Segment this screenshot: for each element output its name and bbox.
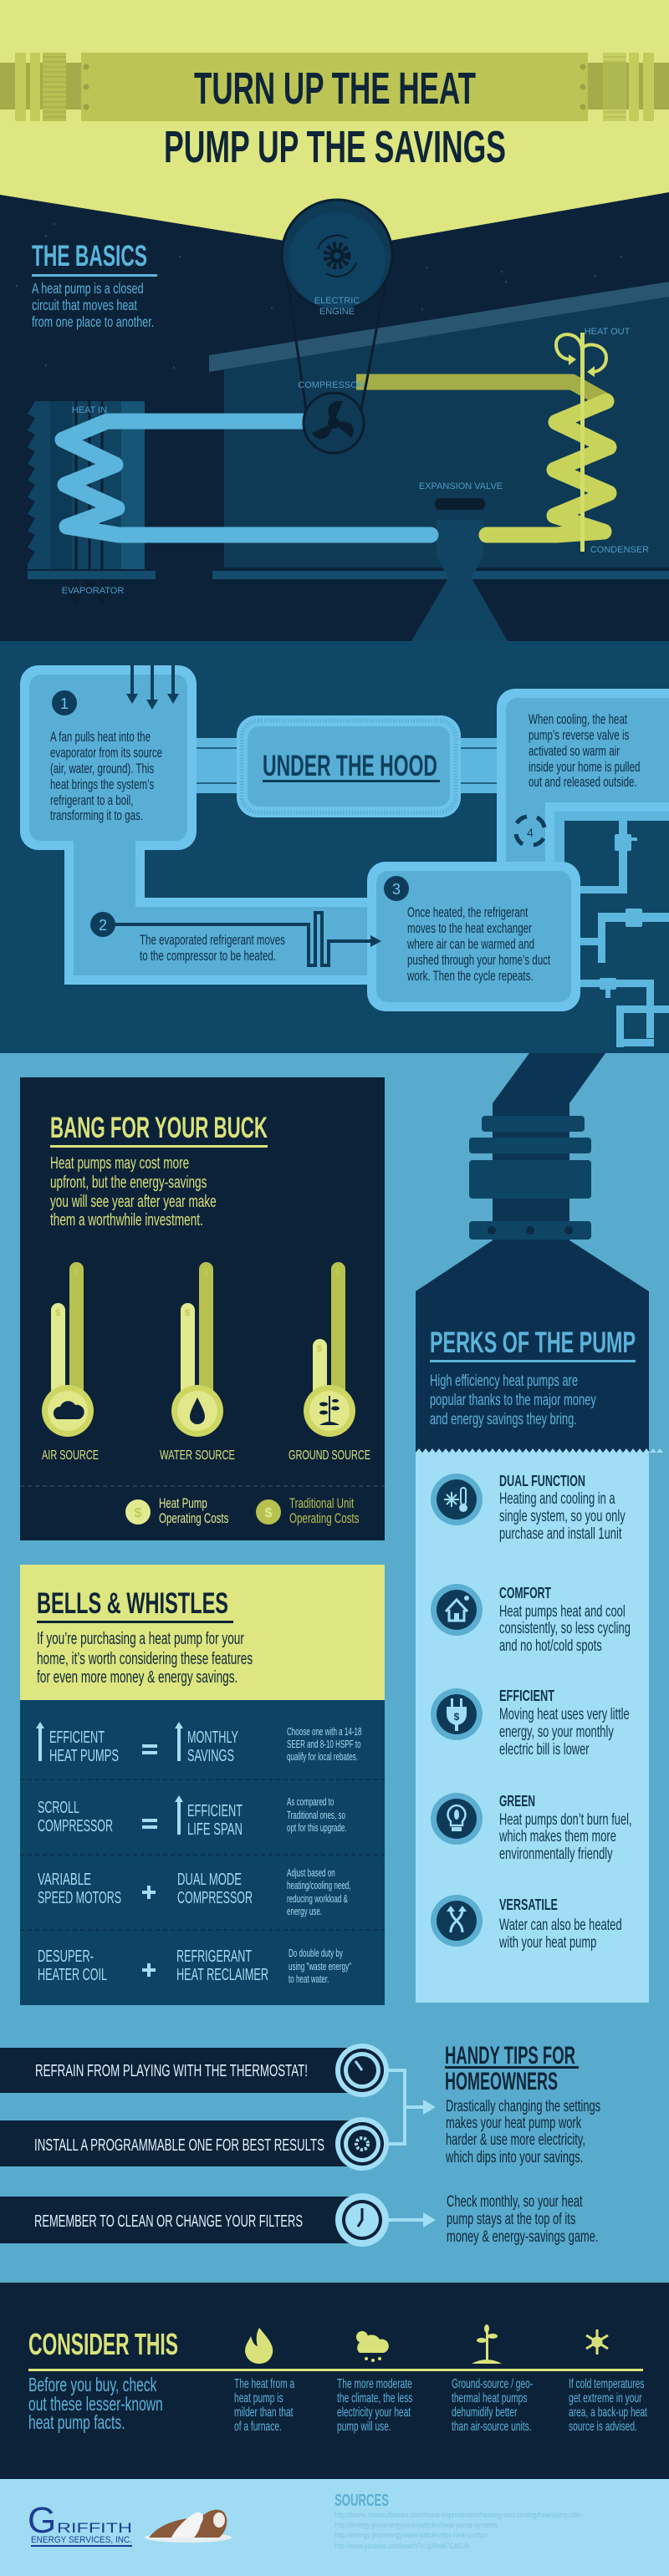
- labels: diagram: ELECTRIC: [314, 296, 360, 306]
- row 3: Adjust based on: [287, 1867, 335, 1880]
- perk: dual function: purchase and install 1unit: [499, 1525, 622, 1543]
- icon: clock: [335, 2193, 389, 2247]
- panel: consider this: heat pump facts.: [28, 2412, 125, 2434]
- icon: compressor fan: [304, 393, 364, 453]
- step 1: 1: [60, 695, 69, 712]
- connectors: [192, 738, 243, 793]
- perk: green: GREEN: [499, 1793, 535, 1810]
- icon: arrows down: [126, 665, 179, 710]
- text: basics body: A heat pump is a closed: [32, 281, 144, 298]
- perk: efficient: Moving heat uses very little: [499, 1706, 630, 1723]
- perk: efficient: $: [454, 1711, 460, 1723]
- panel: consider this: pump will use.: [337, 2419, 391, 2434]
- perk: dual function: [431, 1473, 626, 1543]
- perk: green: which makes them more: [498, 1828, 616, 1845]
- text: bang body: them a worthwhile investment.: [50, 1210, 203, 1229]
- labels: diagram: ENGINE: [319, 307, 355, 317]
- panel: consider this: area, a back-up heat: [569, 2405, 647, 2420]
- panel: handy tips: [0, 2042, 600, 2247]
- icon: moon: [573, 236, 589, 260]
- perk: versatile: Water can also be heated: [499, 1917, 622, 1934]
- panel: consider this: of a furnace.: [234, 2419, 282, 2434]
- chart: thermometers: $: [335, 1267, 340, 1277]
- row 4: to heat water.: [289, 1973, 329, 1986]
- perk: versatile: [431, 1895, 622, 1952]
- sources: http://www.youtube.com/watch?v=g39nM7GbSJA: [334, 2542, 469, 2550]
- perk: efficient: [431, 1688, 630, 1759]
- perk: dual function: DUAL FUNCTION: [499, 1473, 585, 1489]
- row 2: LIFE SPAN: [187, 1820, 243, 1839]
- panel: bells & whistles: for even more money & energy savings.: [37, 1667, 237, 1687]
- step 4: activated so warm air: [529, 744, 620, 760]
- panel: consider this: milder than that: [234, 2405, 294, 2420]
- chart: thermometers: GROUND SOURCE: [289, 1448, 370, 1463]
- perk: versatile: with your heat pump: [498, 1934, 596, 1952]
- roof: [209, 282, 669, 372]
- lime pipe: [356, 382, 606, 401]
- legend: Operating Costs: [289, 1511, 359, 1527]
- box 3 shape: [367, 862, 580, 1011]
- perk: efficient: EFFICIENT: [499, 1688, 554, 1704]
- row 1: HEAT PUMPS: [49, 1747, 119, 1765]
- row 3: DUAL MODE: [177, 1871, 242, 1889]
- step 4: inside your home is pulled: [529, 760, 640, 776]
- step 3: pushed through your home’s duct: [407, 953, 550, 969]
- step 3: 3: [392, 881, 401, 898]
- legend: Traditional Unit: [289, 1496, 354, 1512]
- panel: consider this: the climate, the less: [337, 2390, 413, 2405]
- row 1: MONTHLY: [187, 1728, 238, 1747]
- logo: ENERGY SERVICES, INC.: [31, 2535, 132, 2545]
- perk: comfort: consistently, so less cycling: [499, 1620, 631, 1637]
- legend: [125, 1496, 359, 1527]
- row 2: COMPRESSOR: [38, 1817, 113, 1835]
- row 4: HEATER COIL: [38, 1966, 107, 1984]
- perk: efficient: energy, so your monthly: [499, 1723, 615, 1741]
- panel: consider this: dehumidify better: [452, 2405, 518, 2420]
- panel: handy tips: REFRAIN FROM PLAYING WITH THE THERMOSTAT!: [35, 2062, 308, 2080]
- panel: bells & whistles: If you’re purchasing a heat pump for your: [37, 1629, 244, 1648]
- panel: consider this: The heat from a: [234, 2376, 295, 2391]
- header background: [0, 0, 669, 267]
- logo: [28, 2500, 132, 2547]
- icon: gear: [326, 245, 348, 267]
- step 4: [516, 712, 640, 845]
- panel: handy tips: Drastically changing the settings: [446, 2098, 600, 2115]
- step 1: evaporator from its source: [50, 746, 162, 761]
- panel: consider this: The more moderate: [337, 2376, 412, 2391]
- blue pipe: [63, 421, 431, 535]
- labels: diagram: HEAT IN: [72, 405, 107, 415]
- step 3: Once heated, the refrigerant: [407, 905, 528, 921]
- row 3: COMPRESSOR: [177, 1889, 253, 1907]
- logo: G: [28, 2500, 56, 2541]
- chart: thermometers: $: [203, 1267, 208, 1277]
- step 1: transforming it to gas.: [50, 808, 143, 824]
- icon: programmable dial: [335, 2117, 389, 2171]
- panel: handy tips: Check monthly, so your heat: [447, 2193, 583, 2211]
- panel: under the hood: [0, 641, 669, 1053]
- step 3: [384, 876, 550, 985]
- row 4: REFRIGERANT: [176, 1947, 252, 1966]
- heading: handy tips: [445, 2042, 579, 2095]
- bottle neck: [493, 1053, 605, 1240]
- chart: thermometers: $: [55, 1308, 60, 1318]
- row 2: EFFICIENT: [187, 1802, 243, 1820]
- icon: sprout: [472, 2324, 502, 2364]
- panel: perks of the pump: and energy savings they bring.: [430, 1411, 577, 1428]
- step 3: where air can be warmed and: [406, 937, 534, 953]
- row 3: [38, 1867, 350, 1918]
- panel: consider this: heat pump is: [234, 2390, 283, 2405]
- header pipe: [0, 53, 669, 121]
- step 4: When cooling, the heat: [529, 712, 627, 728]
- step 1: refrigerant to a boil,: [50, 793, 133, 809]
- panel: handy tips: REMEMBER TO CLEAN OR CHANGE YOUR FILTERS: [34, 2212, 303, 2231]
- labels: diagram: EVAPORATOR: [62, 586, 124, 596]
- icon: flame: [245, 2328, 273, 2364]
- step 4: pump’s reverse valve is: [529, 728, 629, 744]
- perk: green: Heat pumps don’t burn fuel,: [499, 1811, 632, 1829]
- heading: handy tips: HOMEOWNERS: [445, 2068, 558, 2095]
- panel: handy tips: money & energy-savings game.: [447, 2228, 599, 2246]
- engine and belt: [282, 200, 392, 453]
- heading: handy tips: HANDY TIPS FOR: [445, 2042, 575, 2069]
- icon: water drop: [190, 1397, 205, 1424]
- labels: diagram: CONDENSER: [590, 545, 649, 555]
- panel: bells & whistles: BELLS & WHISTLES: [37, 1587, 228, 1620]
- step 1: A fan pulls heat into the: [50, 730, 151, 746]
- panel: handy tips: which dips into your savings.: [445, 2149, 583, 2166]
- hood label box: [237, 715, 461, 817]
- chart: thermometers: $: [74, 1267, 79, 1277]
- perk: comfort: [431, 1584, 631, 1655]
- row 3: heating/cooling need,: [287, 1880, 350, 1892]
- panel: handy tips: makes your heat pump work: [446, 2115, 582, 2132]
- panel: consider this: electricity your heat: [337, 2405, 411, 2420]
- perk: green: environmentally friendly: [499, 1845, 613, 1863]
- logo: RIFFITH: [57, 2520, 132, 2536]
- panel: the basics diagram background: [0, 192, 669, 641]
- row 2: [38, 1795, 347, 1839]
- panel: perks of the pump: [416, 1053, 663, 2003]
- step 2: to the compressor to be heated.: [140, 949, 276, 965]
- row 4: DESUPER-: [38, 1947, 94, 1966]
- step 1: (air, water, ground). This: [50, 761, 154, 777]
- step 3: moves to the heat exchanger: [407, 921, 532, 937]
- icon: thermostat dial: [335, 2044, 389, 2097]
- right pipes: [554, 811, 669, 1047]
- expansion valve: [411, 498, 508, 641]
- chart: thermometers: AIR SOURCE: [42, 1448, 99, 1463]
- row 3: reducing workload &: [287, 1893, 348, 1906]
- text: bang body: Heat pumps may cost more: [50, 1153, 189, 1173]
- step 4: out and released outside.: [529, 775, 637, 791]
- row 2: opt for this upgrade.: [287, 1822, 347, 1835]
- text: basics body: from one place to another.: [32, 314, 154, 331]
- row 1: Choose one with a 14-18: [287, 1726, 361, 1739]
- title: PUMP UP THE SAVINGS: [164, 122, 506, 172]
- tip bars: [0, 2048, 355, 2243]
- labels: diagram: COMPRESSOR: [298, 380, 365, 390]
- evaporator block: [28, 400, 145, 603]
- legend: $: [265, 1506, 273, 1520]
- row 1: EFFICIENT: [49, 1728, 105, 1747]
- perk: green: [431, 1793, 632, 1863]
- row 1: qualify for local rebates.: [287, 1751, 358, 1764]
- row 1: SAVINGS: [187, 1747, 234, 1765]
- title: [164, 64, 506, 172]
- panel: handy tips: pump stays at the top of its: [447, 2211, 575, 2228]
- text: bang body: upfront, but the energy-savings: [50, 1173, 207, 1192]
- labels: diagram: EXPANSION VALVE: [419, 481, 503, 491]
- sources: http://energy.gov/energysaver/articles/tips-heat-pumps: [334, 2531, 488, 2539]
- floor: [28, 571, 156, 579]
- text: basics body: circuit that moves heat: [32, 298, 137, 314]
- panel: consider this: get extreme in your: [569, 2390, 642, 2405]
- perk: comfort: Heat pumps heat and cool: [499, 1603, 626, 1621]
- panel: bells & whistles: [20, 1565, 385, 2005]
- sources: http://energy.gov/energysaver/articles/heat-pump-systems: [334, 2521, 498, 2529]
- light section background: [0, 1053, 669, 2283]
- panel: consider this: Before you buy, check: [28, 2375, 157, 2396]
- step 4: 4: [527, 826, 534, 839]
- perk: versatile: VERSATILE: [499, 1896, 558, 1913]
- icon: heat out arrows: [556, 334, 606, 372]
- panel: bells & whistles: home, it’s worth considering these features: [37, 1649, 253, 1668]
- panel: consider this: source is advised.: [569, 2419, 637, 2434]
- heading: the basics: [32, 240, 157, 277]
- panel: consider this: thermal heat pumps: [452, 2390, 528, 2405]
- legend: Heat Pump: [159, 1496, 207, 1512]
- row 4: Do double duty by: [289, 1947, 343, 1960]
- box 4 shape: [497, 689, 669, 878]
- panel: bang for your buck: BANG FOR YOUR BUCK: [50, 1112, 268, 1144]
- heading: under the hood: [263, 750, 440, 782]
- row 4: using "waste energy": [289, 1961, 351, 1973]
- heading: under the hood: UNDER THE HOOD: [263, 750, 437, 782]
- sources: [334, 2492, 581, 2550]
- row 3: SPEED MOTORS: [38, 1889, 121, 1907]
- text: basics body: [32, 281, 154, 331]
- icon: weather: [356, 2331, 389, 2362]
- panel: perks of the pump: High efficiency heat pumps are: [430, 1372, 578, 1390]
- text: bang body: [50, 1153, 217, 1229]
- connectors: [386, 2070, 425, 2220]
- icon: snowflake: [586, 2329, 608, 2355]
- icon: cloud: [54, 1401, 84, 1419]
- chart: thermometers: $: [185, 1308, 190, 1318]
- step 1: heat brings the system’s: [50, 777, 154, 793]
- box 1 shape: [20, 665, 391, 985]
- step 2: [90, 912, 381, 965]
- panel: handy tips: INSTALL A PROGRAMMABLE ONE FOR BEST RESULTS: [34, 2136, 324, 2155]
- labels: diagram: [62, 296, 649, 596]
- panel: consider this: [0, 2283, 669, 2479]
- heading: the basics: THE BASICS: [32, 240, 147, 272]
- step 2: 2: [99, 917, 107, 934]
- step 1: [50, 690, 162, 824]
- row 2: SCROLL: [38, 1799, 79, 1817]
- perk: dual function: Heating and cooling in a: [499, 1490, 615, 1508]
- step 2: The evaporated refrigerant moves: [140, 933, 285, 949]
- row 1: [36, 1722, 361, 1765]
- image: dog and girl: [145, 2510, 232, 2543]
- row 3: VARIABLE: [38, 1871, 91, 1889]
- row 1: SEER and 8-10 HSPF to: [287, 1739, 361, 1751]
- panel: consider this: Ground-source / geo-: [452, 2376, 533, 2391]
- chart: thermometers: $: [317, 1344, 322, 1354]
- chart: thermometers: WATER SOURCE: [160, 1448, 235, 1463]
- footer: [0, 2479, 669, 2576]
- chart: thermometers: [42, 1262, 370, 1463]
- row 4: [38, 1947, 351, 1986]
- perk: efficient: electric bill is lower: [499, 1741, 590, 1759]
- panel: consider this: than air-source units.: [452, 2419, 532, 2434]
- panel: bang for your buck: [20, 1077, 385, 1540]
- row 2: Traditional ones, so: [287, 1810, 345, 1822]
- panel: handy tips: harder & use more electricity,: [446, 2131, 585, 2149]
- perk: comfort: and no hot/cold spots: [499, 1637, 602, 1655]
- panel: consider this: out these lesser-known: [28, 2394, 163, 2416]
- title: TURN UP THE HEAT: [194, 64, 476, 114]
- legend: $: [135, 1506, 142, 1520]
- legend: Operating Costs: [159, 1511, 228, 1527]
- text: bang body: you will see year after year make: [50, 1192, 217, 1211]
- icon: plant: [319, 1396, 340, 1425]
- panel: perks of the pump: popular thanks to the major money: [430, 1392, 596, 1409]
- perk: dual function: single system, so you only: [499, 1508, 626, 1525]
- step 3: work. Then the cycle repeats.: [406, 969, 534, 985]
- row 2: As compared to: [287, 1796, 334, 1809]
- row 3: energy use.: [287, 1906, 322, 1918]
- panel: consider this: CONSIDER THIS: [28, 2327, 178, 2361]
- sources: http://home.howstuffworks.com/home-improvement/heating-and-cooling/heat-pump.htm: [334, 2511, 581, 2519]
- panel: consider this: If cold temperatures: [569, 2376, 645, 2391]
- perk: comfort: COMFORT: [499, 1585, 551, 1601]
- row 4: HEAT RECLAIMER: [176, 1966, 268, 1984]
- labels: diagram: HEAT OUT: [585, 327, 631, 337]
- sources: SOURCES: [334, 2492, 389, 2510]
